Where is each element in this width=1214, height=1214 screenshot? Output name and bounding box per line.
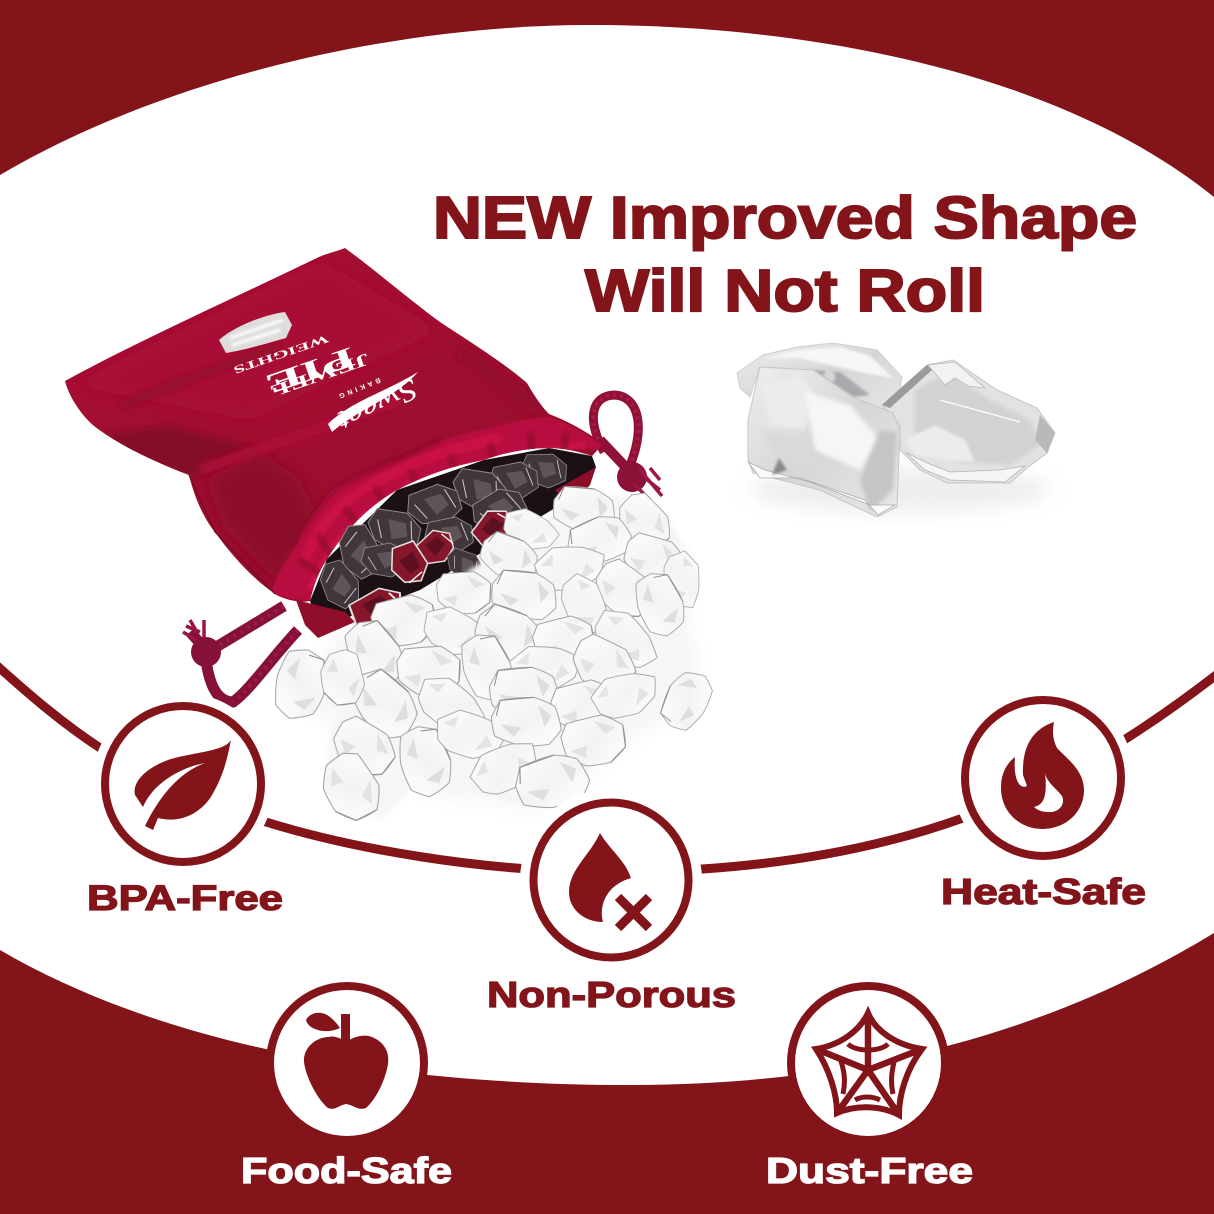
connector arc linking feature icons (0, 663, 1214, 872)
rope: right loop (593, 395, 662, 500)
feature: BPA-Free (87, 693, 283, 918)
feature: Dust-Free (766, 986, 973, 1191)
feature: Heat-Safe (941, 687, 1146, 912)
printed logo on bag: PIE (261, 340, 358, 400)
headline: NEW Improved Shape (433, 185, 1137, 251)
badge ring (534, 802, 688, 958)
label: Non-Porous (487, 974, 736, 1015)
badge ring (965, 700, 1121, 856)
feature: Food-Safe (241, 986, 452, 1191)
icon: flame (1001, 722, 1084, 829)
shadow under pile (300, 500, 700, 810)
printed logo on bag: WEIGHTS (232, 332, 330, 376)
label: Heat-Safe (941, 871, 1146, 912)
photo: red velvet drawstring bag with spilled jewels (65, 248, 720, 831)
headline (433, 185, 1137, 324)
gathered hem (270, 417, 610, 601)
feature: Non-Porous (487, 789, 736, 1015)
printed logo on bag: JEWEL (268, 349, 372, 401)
label: BPA-Free (87, 879, 283, 918)
printed logo on bag: BAKING (337, 376, 381, 399)
clear jewel pile (270, 480, 720, 831)
icon: leaf (135, 740, 231, 830)
badge ring (270, 986, 424, 1140)
headline: Will Not Roll (585, 258, 985, 324)
dark jewels inside bag (312, 449, 570, 632)
pile base (325, 490, 695, 820)
bag seam (189, 475, 275, 594)
printed logo on bag: Sweet (332, 372, 423, 438)
icon: spider web (816, 1013, 922, 1115)
badge ring (791, 986, 945, 1140)
bag interior (310, 448, 596, 628)
badge ring (105, 706, 261, 862)
bag body (65, 248, 603, 602)
icon: water drop with cross (569, 833, 649, 928)
photo: three large clear jewel weights (737, 343, 1055, 517)
label: Dust-Free (766, 1150, 973, 1191)
label: Food-Safe (241, 1150, 452, 1191)
icon: apple (304, 1013, 388, 1109)
printed logo on bag (219, 312, 423, 438)
rope: left double cord (183, 606, 298, 702)
